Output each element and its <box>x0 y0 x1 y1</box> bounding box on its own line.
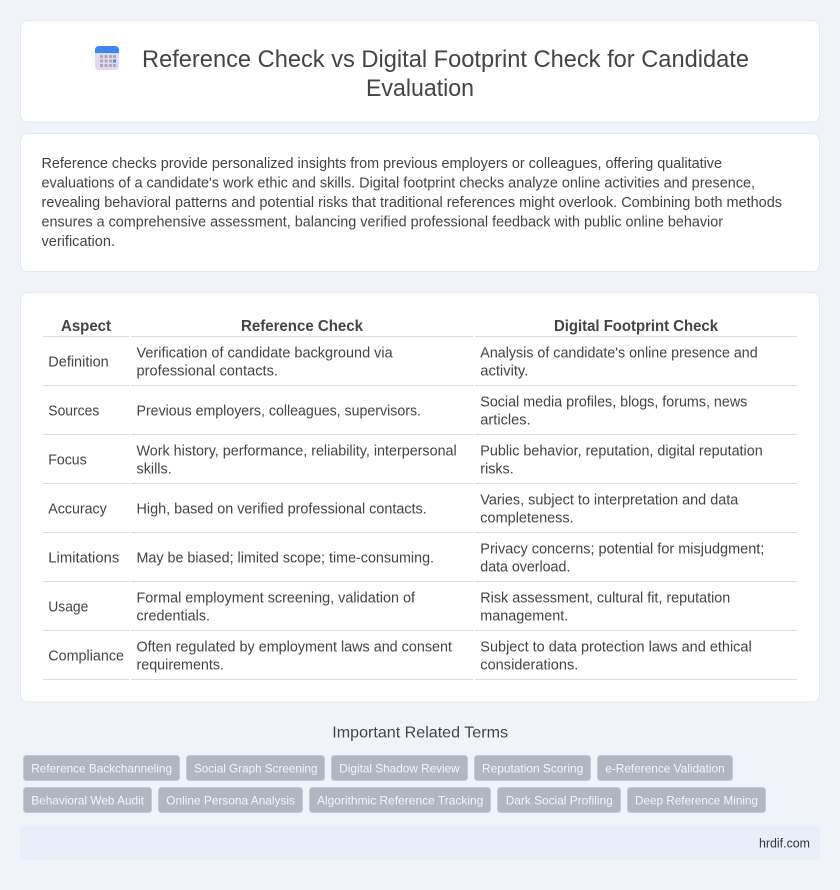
row: limitations: data overload. <box>480 560 570 576</box>
table header: Digital Footprint Check <box>554 318 718 335</box>
tag: dark social profiling <box>498 788 620 812</box>
row: focus: skills. <box>136 462 172 478</box>
row: usage: management. <box>480 608 568 624</box>
row: sources: Social media profiles, blogs, forums, news <box>480 394 747 410</box>
row: compliance: Often regulated by employment laws and consent <box>136 640 452 656</box>
row: definition: Analysis of candidate's online presence and <box>480 346 758 362</box>
tag: digital shadow review: Digital Shadow Review <box>339 761 460 775</box>
row: accuracy: completeness. <box>480 510 574 526</box>
row: sources <box>43 394 797 435</box>
tag: e-reference validation: e-Reference Validation <box>605 761 725 775</box>
row: definition: activity. <box>480 364 528 380</box>
tag: online persona analysis <box>158 788 302 812</box>
table header <box>43 318 797 337</box>
header panel <box>20 20 820 122</box>
row: definition: professional contacts. <box>136 364 278 380</box>
row: focus <box>43 444 797 484</box>
tag: reference backchanneling: Reference Backchanneling <box>31 761 172 775</box>
row: limitations: Privacy concerns; potential for misjudgment; <box>480 542 764 558</box>
row: focus: Work history, performance, reliability, interpersonal <box>136 444 457 460</box>
row: usage: Usage <box>48 600 88 616</box>
row: usage: Formal employment screening, validation of <box>136 590 416 606</box>
heading: important related terms: Important Related Terms <box>332 724 508 742</box>
row: definition <box>43 346 797 386</box>
footer credit: hrdif.com <box>759 835 810 850</box>
row: sources: Previous employers, colleagues, supervisors. <box>136 404 421 420</box>
summary text: verification. <box>42 234 115 250</box>
title: Evaluation <box>366 75 474 102</box>
tag: online persona analysis: Online Persona Analysis <box>166 793 295 807</box>
tag: algorithmic reference tracking: Algorithmic Reference Tracking <box>317 793 483 807</box>
row: accuracy: High, based on verified professional contacts. <box>136 502 427 518</box>
row: compliance: Subject to data protection laws and ethical <box>480 640 752 656</box>
row: compliance <box>43 640 797 680</box>
row: definition: Verification of candidate background via <box>136 346 393 362</box>
tag: algorithmic reference tracking <box>310 788 490 812</box>
table header: Aspect <box>61 318 112 335</box>
summary text: Reference checks provide personalized insights from previous employers or colleagues, offering qualitative <box>42 156 722 172</box>
row: sources: Sources <box>48 404 99 420</box>
row: limitations: May be biased; limited scope; time-consuming. <box>136 550 434 566</box>
row: usage <box>43 590 797 631</box>
row: usage: Risk assessment, cultural fit, reputation <box>480 590 730 606</box>
row: limitations: Limitations <box>48 550 119 566</box>
tag: social graph screening <box>186 756 324 780</box>
panel: comparison table <box>20 292 820 702</box>
tag: reputation scoring <box>474 756 590 780</box>
row: compliance: considerations. <box>480 658 578 674</box>
tag: reference backchanneling <box>24 756 180 780</box>
row: focus: risks. <box>480 462 514 478</box>
table header: Reference Check <box>241 318 363 335</box>
summary text <box>42 156 782 250</box>
footer <box>20 826 820 860</box>
row: definition: Definition <box>48 354 109 370</box>
row: sources: articles. <box>480 412 531 428</box>
row: compliance: Compliance <box>48 648 124 664</box>
summary text: ensures a comprehensive assessment, balancing verified professional feedback with public online behavior <box>42 214 723 230</box>
title: Reference Check vs Digital Footprint Check for Candidate <box>142 46 749 73</box>
tag: e-reference validation <box>598 756 732 780</box>
row: accuracy: Varies, subject to interpretation and data <box>480 492 738 508</box>
tag: social graph screening: Social Graph Screening <box>194 761 318 775</box>
row: accuracy <box>43 492 797 533</box>
title <box>142 46 749 102</box>
tag: dark social profiling: Dark Social Profiling <box>506 793 613 807</box>
summary text: revealing behavioral patterns and potential risks that traditional references might overlook. Combining both methods <box>42 195 782 211</box>
related term tags <box>24 756 766 812</box>
tag: deep reference mining <box>628 788 766 812</box>
tag: reputation scoring: Reputation Scoring <box>482 761 583 775</box>
summary text: evaluations of a candidate's work ethic and skills. Digital footprint checks analyze online activities and presence, <box>42 176 755 192</box>
row: compliance: requirements. <box>136 658 224 674</box>
row: limitations <box>43 542 797 582</box>
tag: behavioral web audit <box>24 788 152 812</box>
row: focus: Public behavior, reputation, digital reputation <box>480 444 763 460</box>
row: focus: Focus <box>48 452 87 468</box>
icon: calendar <box>95 46 119 70</box>
row: usage: credentials. <box>136 608 210 624</box>
panel: summary paragraph <box>20 134 820 272</box>
tag: deep reference mining: Deep Reference Mining <box>635 793 758 807</box>
tag: behavioral web audit: Behavioral Web Audit <box>31 793 145 807</box>
tag: digital shadow review <box>332 756 468 780</box>
row: accuracy: Accuracy <box>48 502 107 518</box>
